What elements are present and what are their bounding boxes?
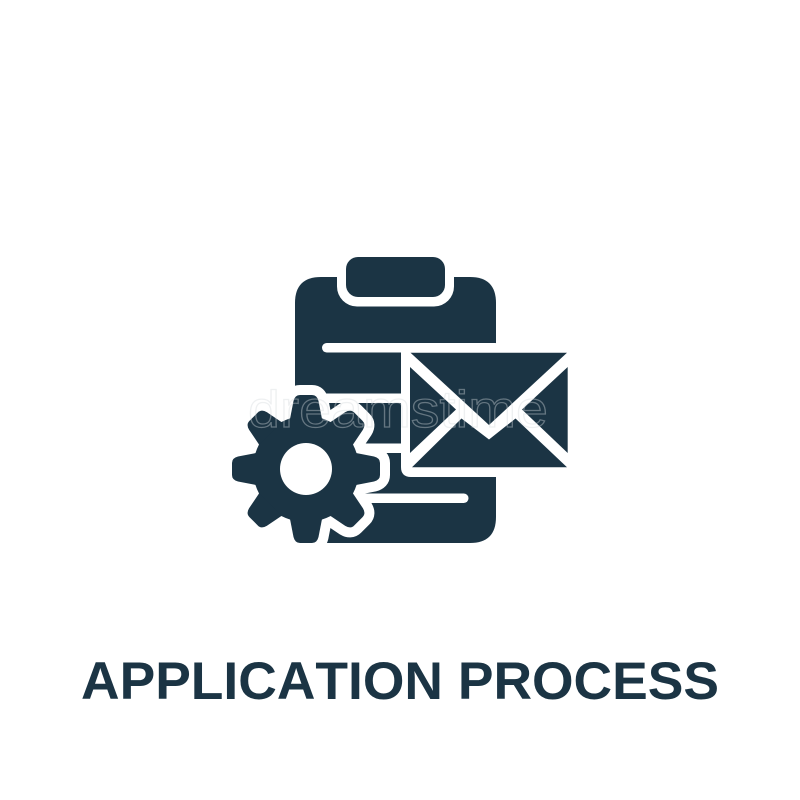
clipboard cut-out around clip	[337, 250, 454, 306]
title: APPLICATION PROCESS	[81, 652, 719, 711]
icon: gear	[232, 395, 380, 543]
clipboard cut-out around envelope	[401, 347, 500, 477]
clipboard text line 3	[350, 444, 410, 453]
icon: clipboard, envelope and gear	[232, 250, 568, 543]
watermark: dreamstime	[248, 381, 548, 439]
icon: clipboard clip	[346, 257, 445, 297]
clipboard text line 4	[350, 494, 468, 503]
icon: envelope	[410, 353, 568, 467]
icon: clipboard body	[295, 250, 500, 543]
clipboard text line 2	[310, 394, 410, 403]
clipboard text line 1	[322, 343, 500, 352]
icon: gear halo	[232, 395, 380, 543]
